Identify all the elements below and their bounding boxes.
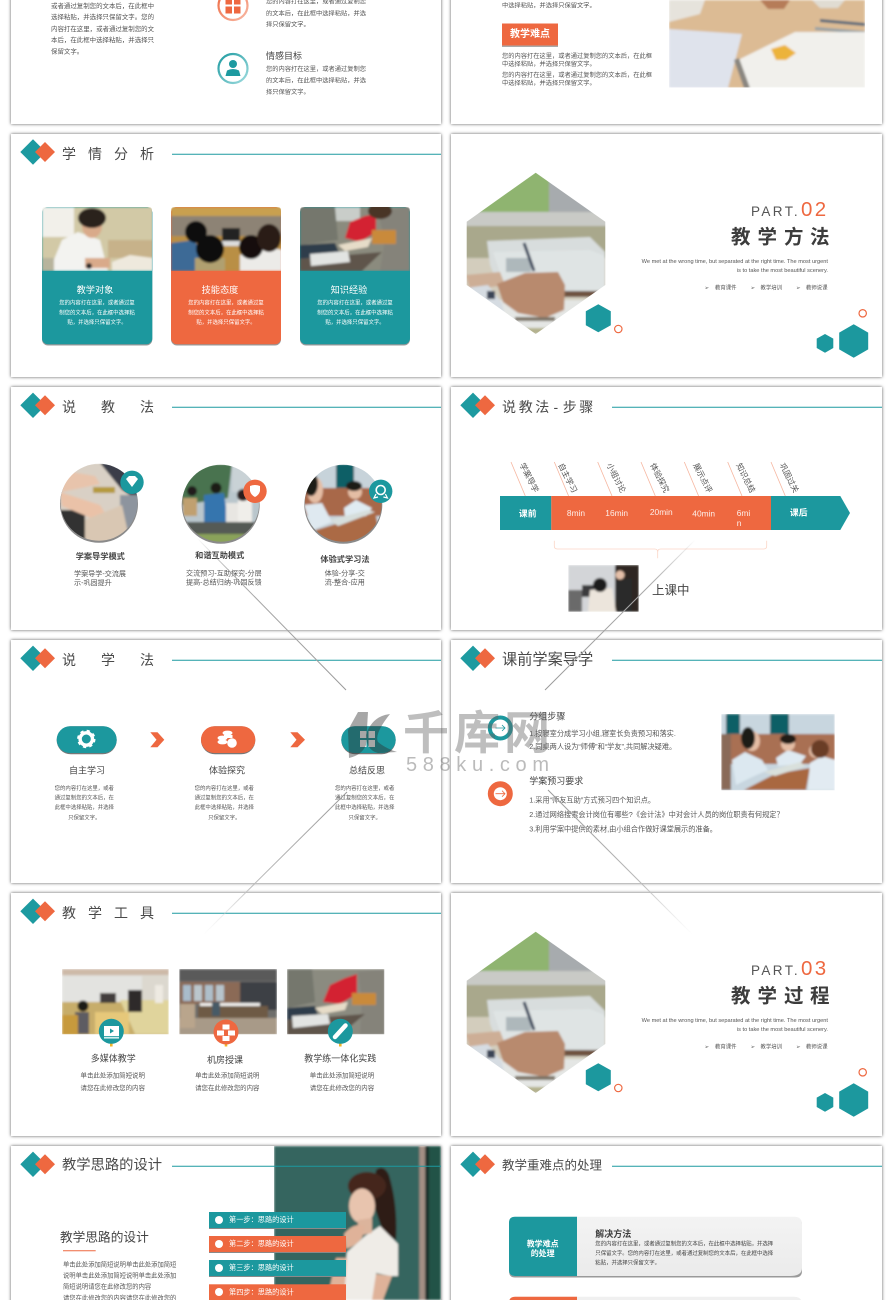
text: item body: 示-巩固提升 — [74, 578, 112, 587]
chart: process timeline arrow: 8min — [567, 508, 585, 518]
icon: gear — [78, 731, 94, 747]
chart: diagonal step ticks and labels: 体验探究 — [648, 461, 672, 494]
card: 教学难点的处理 — [509, 1217, 802, 1278]
text: step body: 只保留文字。 — [349, 813, 381, 821]
text block: English subtitle: We met at the wrong time, but separated at the right time. The most urgent — [642, 1018, 828, 1024]
text block: 学案预习要求: 2.通过网络搜索会计岗位有哪些?《会计法》中对会计人员的岗位职责有何规定？ — [529, 810, 784, 819]
heading: 教学思路的设计: 教学思路的设计 — [62, 1157, 162, 1174]
label: 教学难点 button — [502, 24, 558, 47]
list: course links: 教育课件 — [715, 1042, 737, 1050]
text block: description: 说明单击此处添加简短说明单击此处添加 — [63, 1270, 176, 1280]
icon: header diamonds — [20, 1152, 55, 1177]
panel: 说教法 — [11, 387, 441, 630]
icon: header diamonds — [20, 899, 55, 924]
heading: PART.03: 03 — [801, 957, 829, 980]
icon: decorative hexagons and ring — [817, 310, 868, 358]
photo: group with books — [287, 969, 385, 1035]
text block: difficulty paragraphs — [502, 51, 653, 87]
chart: process timeline arrow: 课前 — [519, 507, 537, 518]
text: tool body: 单击此处添加简短说明 — [310, 1070, 374, 1080]
icon: small teal hexagon — [586, 1063, 611, 1091]
text: card heading: 教学对象 — [77, 284, 113, 295]
card: 教学对象 — [42, 207, 153, 346]
list: course links: 教学培训 — [760, 283, 782, 291]
heading: 教学工具: 教学工具 — [62, 905, 154, 921]
text: step body: 您的内容打在这里，或者 — [335, 784, 395, 792]
step bar: 第三步: 第三步：思路的设计 — [229, 1263, 294, 1272]
text: tool body — [195, 1070, 260, 1092]
panel: 教学工具 — [11, 893, 441, 1136]
icon: gem badge — [120, 471, 144, 494]
text: step body: 通过复制您的文本后，在 — [195, 794, 255, 802]
heading: 说教法: 说教法 — [62, 399, 154, 415]
text: card body: 贴，并选择只保留文字。 — [67, 318, 127, 326]
text: card body: 粘贴，并选择只保留文字。 — [595, 1259, 660, 1267]
step: 总结反思 — [335, 726, 396, 821]
chart: process timeline arrow: 课后 — [790, 507, 808, 518]
text block: top paragraph: 中选择粘贴，并选择只保留文字。 — [502, 0, 596, 10]
list: course links: 教师说课 — [806, 1042, 828, 1050]
panel: PART.02 教学方法 — [451, 134, 882, 377]
photo: students cheering, circle — [182, 464, 260, 544]
panel: cropped slide with learning goals — [11, 0, 441, 124]
text: tool body: 请您在此修改您的内容 — [81, 1083, 145, 1092]
text: card label: 教学难点 — [527, 1238, 559, 1248]
list: course links: 教育课件 — [715, 283, 737, 291]
photo: teacher and student — [568, 565, 639, 612]
photo: classroom girls, circle — [304, 464, 382, 544]
icon: header diamonds — [460, 646, 495, 671]
text block: 学案预习要求: 学案预习要求 — [529, 775, 583, 786]
text block: 学案预习要求: 3.利用学案中提供的素材,由小组合作做好课堂展示的准备。 — [529, 824, 717, 834]
label: 上课中: 上课中 — [652, 583, 690, 598]
card: 知识经验 — [300, 203, 410, 346]
text: tool body — [310, 1070, 375, 1092]
text block: English subtitle: is to take the most beautiful scenery. — [737, 268, 828, 274]
chart: diagonal step ticks and labels: 知识总结 — [734, 461, 758, 494]
icon: video screen — [99, 1019, 124, 1046]
step bar: 第一步: 第一步：思路的设计 — [229, 1215, 294, 1224]
text: card body — [59, 299, 135, 326]
text: step body: 您的内容打在这里，或者 — [55, 784, 115, 792]
text: item body: 流-整合-应用 — [325, 578, 365, 587]
step bar: 第二步 — [209, 1236, 346, 1253]
text: step body: 通过复制您的文本后，在 — [55, 794, 115, 802]
text block: description: 简短说明请您在此修改您的内容 — [63, 1282, 152, 1290]
heading: 教学过程: 教学过程 — [731, 984, 830, 1008]
line: header rule — [172, 1165, 441, 1167]
step: 自主学习 — [55, 726, 117, 821]
text block: difficulty paragraphs: 中选择粘贴，并选择只保留文字。 — [502, 78, 596, 87]
bracket: in-class span — [554, 541, 767, 558]
text block: emotional goal: 您的内容打在这里，或者通过复制您 — [266, 64, 366, 73]
text block: 学案预习要求 — [529, 775, 784, 834]
heading: PART.03: PART. — [751, 963, 800, 978]
text block: emotional goal: 择只保留文字。 — [266, 87, 310, 96]
text: card label: 的处理 — [531, 1248, 555, 1258]
chart: diagonal step ticks and labels: 自主学习 — [556, 461, 580, 494]
text: step body: 此框中选择粘贴，并选择 — [195, 803, 255, 811]
icon: orange arrow ring — [491, 784, 510, 803]
step bar: 第二步: 第二步：思路的设计 — [229, 1239, 294, 1248]
item: 和谐互助模式 — [182, 464, 267, 586]
text block: upper goal text: 的文本后，在此框中选择粘贴，并选 — [266, 8, 367, 18]
icon: teal arrow ring — [490, 718, 511, 738]
heading: 课前学案导学: 课前学案导学 — [502, 650, 593, 668]
step bar: 第三步 — [209, 1260, 346, 1277]
photo: computer room — [179, 969, 277, 1035]
heading: PART.02: 02 — [801, 198, 829, 221]
photo: reading room — [62, 969, 169, 1035]
text: tool body — [81, 1070, 145, 1092]
text: step body — [335, 784, 395, 821]
icon: shield badge — [243, 480, 267, 503]
text: card body — [317, 299, 393, 326]
arrow: chevron one — [150, 732, 164, 747]
text: item body: 交流预习-互助探究-分层 — [186, 568, 262, 577]
watermark: 千库网 logo and text: 588ku.com — [406, 754, 549, 776]
list: course links — [704, 283, 828, 291]
step bar: 第一步 — [209, 1212, 346, 1229]
step bar: 第四步: 第四步：思路的设计 — [229, 1288, 294, 1296]
text: card body: 制您的文本后，在此框中选择粘 — [188, 308, 264, 316]
text: item heading: 学案导学模式 — [76, 551, 125, 561]
text: step body: 只保留文字。 — [208, 813, 240, 821]
icon: small teal hexagon — [586, 304, 611, 332]
text: step body: 您的内容打在这里，或者 — [195, 784, 255, 792]
panel: 说学法 — [11, 640, 441, 883]
text block: upper goal text: 择只保留文字。 — [266, 20, 310, 28]
text: card body — [188, 299, 264, 326]
list: course links: ➢ — [796, 285, 801, 291]
watermark: 千库网 logo and text — [348, 707, 550, 776]
text: step body: 此框中选择粘贴，并选择 — [55, 803, 115, 811]
panel: 说教法-步骤 — [451, 387, 882, 630]
text block: left column text: 本后，在此框中选择粘贴，并选择只 — [51, 35, 155, 44]
photo: hand writing, hexagon — [460, 170, 610, 340]
text block: emotional goal — [266, 64, 367, 96]
heading: 说教法-步骤: 说教法-步骤 — [502, 399, 593, 415]
list: course links: 教学培训 — [760, 1042, 782, 1050]
list: course links — [704, 1042, 828, 1050]
watermark: diagonal lines — [197, 538, 695, 935]
text block: difficulty paragraphs: 您的内容打在这里，或者通过复制您的文本后，在此框 — [502, 70, 653, 79]
icon: network boxes — [214, 1020, 238, 1046]
chart: process timeline arrow: 20min — [650, 507, 673, 517]
text: item heading: 体验式学习法 — [320, 554, 370, 564]
text: card label — [527, 1238, 559, 1258]
photo: teacher at chalkboard — [274, 1146, 441, 1300]
text block: difficulty paragraphs: 中选择粘贴，并选择只保留文字。 — [502, 59, 596, 68]
step bar: 第四步 — [209, 1284, 346, 1300]
icon: header diamonds — [460, 393, 495, 418]
heading: 教学方法: 教学方法 — [731, 226, 830, 248]
text: tool body: 请您在此修改您的内容 — [195, 1083, 260, 1092]
text block: English subtitle: is to take the most beautiful scenery. — [737, 1027, 828, 1033]
text block: upper goal text — [266, 0, 367, 28]
text: step heading: 自主学习 — [69, 764, 105, 775]
panel: cropped slide with teaching difficulty — [451, 0, 882, 124]
tool: 多媒体教学 — [81, 1019, 145, 1092]
photo: hands and phone, circle — [60, 463, 140, 543]
text: step body — [55, 784, 115, 821]
photo: student reading — [42, 207, 153, 271]
heading: 教学重难点的处理: 教学重难点的处理 — [502, 1158, 603, 1172]
text: card body — [595, 1239, 774, 1267]
text: card heading: 知识经验 — [331, 284, 367, 295]
card: second item top edge — [509, 1297, 802, 1300]
text: step heading: 总结反思 — [349, 764, 385, 775]
text: item body: 提高-总结归纳-巩固反馈 — [186, 577, 262, 586]
chart: diagonal step ticks and labels: 小组讨论 — [605, 461, 628, 494]
text: tool body: 请您在此修改您的内容 — [310, 1083, 375, 1092]
list: course links: ➢ — [704, 1044, 709, 1050]
heading: 学情分析: 学情分析 — [62, 146, 154, 162]
chart: diagonal step ticks and labels: 学案导学 — [518, 461, 541, 494]
icon: header diamonds — [20, 393, 55, 418]
text block: left column text — [51, 1, 155, 56]
icon: orange ring — [615, 1084, 622, 1092]
heading: sub title: 教学思路的设计 — [60, 1229, 149, 1244]
text: card heading: 技能态度 — [202, 284, 238, 295]
text block: 分组步骤: 2.同桌两人设为“师傅”和“学友”,共同解决疑难。 — [529, 742, 676, 751]
text: item body — [325, 569, 365, 587]
text: item body — [74, 569, 126, 587]
chart: diagonal step ticks and labels: 巩固过关 — [778, 461, 801, 494]
icon: coins with check — [218, 731, 237, 748]
label: 教学难点 button: 教学难点 — [510, 27, 550, 40]
text block: description — [63, 1260, 177, 1300]
tool: 教学练一体化实践 — [304, 1019, 376, 1092]
text block: 分组步骤: 1.按寝室分成学习小组,寝室长负责预习和落实. — [529, 729, 676, 738]
chart: process timeline arrow: n — [737, 518, 742, 528]
text: card body: 制您的文本后，在此框中选择粘 — [59, 308, 135, 316]
text: tool heading: 教学练一体化实践 — [304, 1052, 376, 1063]
icon: teal ring with person — [218, 54, 248, 83]
text block: difficulty paragraphs: 您的内容打在这里，或者通过复制您的文本后，在此框 — [502, 51, 653, 60]
chart: diagonal step ticks and labels: 展示点评 — [691, 462, 714, 494]
list: course links: ➢ — [750, 1044, 755, 1050]
icon: header diamonds — [20, 139, 55, 165]
text: card body: 只保留文字。您的内容打在这里，或者通过复制您的文本后，在此框中选择 — [595, 1249, 774, 1257]
text: card body: 您的内容打在这里，或者通过复制您的文本后，在此框中选择粘贴，并选择 — [595, 1239, 774, 1247]
text: tool body: 单击此处添加简短说明 — [195, 1070, 259, 1080]
step: 体验探究 — [195, 726, 255, 821]
text: step body: 此框中选择粘贴，并选择 — [335, 803, 395, 811]
text: card body: 您的内容打在这里，或者通过复 — [59, 299, 135, 307]
heading: 情感目标: 情感目标 — [266, 50, 302, 61]
panel: PART.03 教学过程 — [451, 893, 882, 1136]
panel: 学情分析 — [11, 134, 441, 377]
text block: 学案预习要求: 1.采用“师友互助”方式预习四个知识点。 — [529, 796, 655, 804]
text block: English subtitle: We met at the wrong time, but separated at the right time. The most urgent — [642, 259, 828, 265]
photo: books on a wooden desk — [669, 0, 865, 88]
text: item heading: 和谐互助模式 — [195, 550, 244, 560]
text block: 分组步骤: 分组步骤 — [529, 710, 565, 721]
text: step body: 通过复制您的文本后，在 — [335, 794, 395, 802]
chart: process timeline arrow: 6mi — [737, 508, 750, 518]
text block: 分组步骤 — [529, 710, 676, 751]
icon: orange ring — [615, 325, 622, 333]
icon: decorative hexagons and ring — [817, 1069, 868, 1117]
chart: diagonal step ticks and labels — [511, 461, 801, 496]
icon: header diamonds — [20, 646, 55, 671]
panel: 教学重难点的处理 — [451, 1146, 882, 1300]
chart: process timeline arrow — [500, 496, 850, 530]
arrow: chevron two — [290, 732, 305, 747]
text: card body: 贴，并选择只保留文字。 — [325, 318, 385, 326]
text block: English subtitle — [642, 1018, 828, 1033]
item: 体验式学习法 — [304, 464, 392, 587]
text: step heading: 体验探究 — [209, 764, 245, 775]
text: tool heading: 机房授课 — [207, 1054, 243, 1065]
list: course links: ➢ — [750, 285, 755, 291]
text block: left column text: 或者通过复制您的文本后，在此框中 — [51, 1, 154, 10]
photo: students chatting in classroom — [721, 714, 835, 791]
panel: 课前学案导学 — [451, 640, 882, 883]
text block: description: 单击此处添加简短说明单击此处添加简短 — [63, 1260, 177, 1268]
icon: header diamonds — [460, 1152, 495, 1177]
text: item body: 体验-分享-交 — [325, 569, 365, 578]
text: item body: 学案导学-交流展 — [74, 569, 126, 578]
text: step body — [195, 784, 255, 821]
photo: students around a laptop — [171, 207, 282, 271]
icon: grid — [360, 731, 375, 747]
text: card heading: 解决方法 — [595, 1228, 631, 1239]
icon: medal badge — [369, 480, 392, 503]
tool: 机房授课 — [195, 1020, 260, 1092]
heading: PART.02 — [751, 198, 829, 221]
text block: emotional goal: 的文本后，在此框中选择粘贴，并选 — [266, 76, 367, 84]
text block: left column text: 选择粘贴，并选择只保留文字。您的 — [51, 12, 154, 21]
icon: orange ring with grid — [218, 0, 248, 20]
text block: English subtitle — [642, 259, 828, 274]
list: course links: ➢ — [796, 1044, 801, 1050]
text: step body: 只保留文字。 — [68, 813, 100, 821]
card: 技能态度 — [171, 207, 282, 346]
watermark: 千库网 logo and text: 千库网 — [403, 707, 550, 759]
list: course links: 教师说课 — [806, 283, 828, 291]
panel: 教学思路的设计 — [11, 1146, 441, 1300]
photo: hand writing, hexagon — [460, 929, 610, 1099]
text: card body: 制您的文本后，在此框中选择粘 — [317, 308, 393, 316]
text: tool heading: 多媒体教学 — [91, 1052, 136, 1063]
heading: PART.02: PART. — [751, 204, 800, 219]
heading: 说学法: 说学法 — [62, 652, 154, 668]
text: card body: 您的内容打在这里，或者通过复 — [317, 299, 393, 307]
chart: process timeline arrow: 16min — [605, 508, 628, 518]
text: tool body: 单击此处添加简短说明 — [81, 1070, 145, 1080]
list: course links: ➢ — [704, 285, 709, 291]
text block: left column text: 保留文字。 — [51, 46, 83, 56]
item: 学案导学模式 — [60, 463, 144, 587]
heading: PART.03 — [751, 957, 829, 980]
photo: group with books — [300, 203, 410, 271]
chart: process timeline arrow: 40min — [692, 508, 715, 518]
text: card body: 您的内容打在这里，或者通过复 — [188, 299, 264, 307]
icon: pencil — [328, 1019, 353, 1046]
text block: left column text: 内容打在这里，或者通过复制您的文 — [51, 24, 155, 33]
text: item body — [186, 568, 262, 586]
text: card body: 贴，并选择只保留文字。 — [196, 318, 256, 326]
